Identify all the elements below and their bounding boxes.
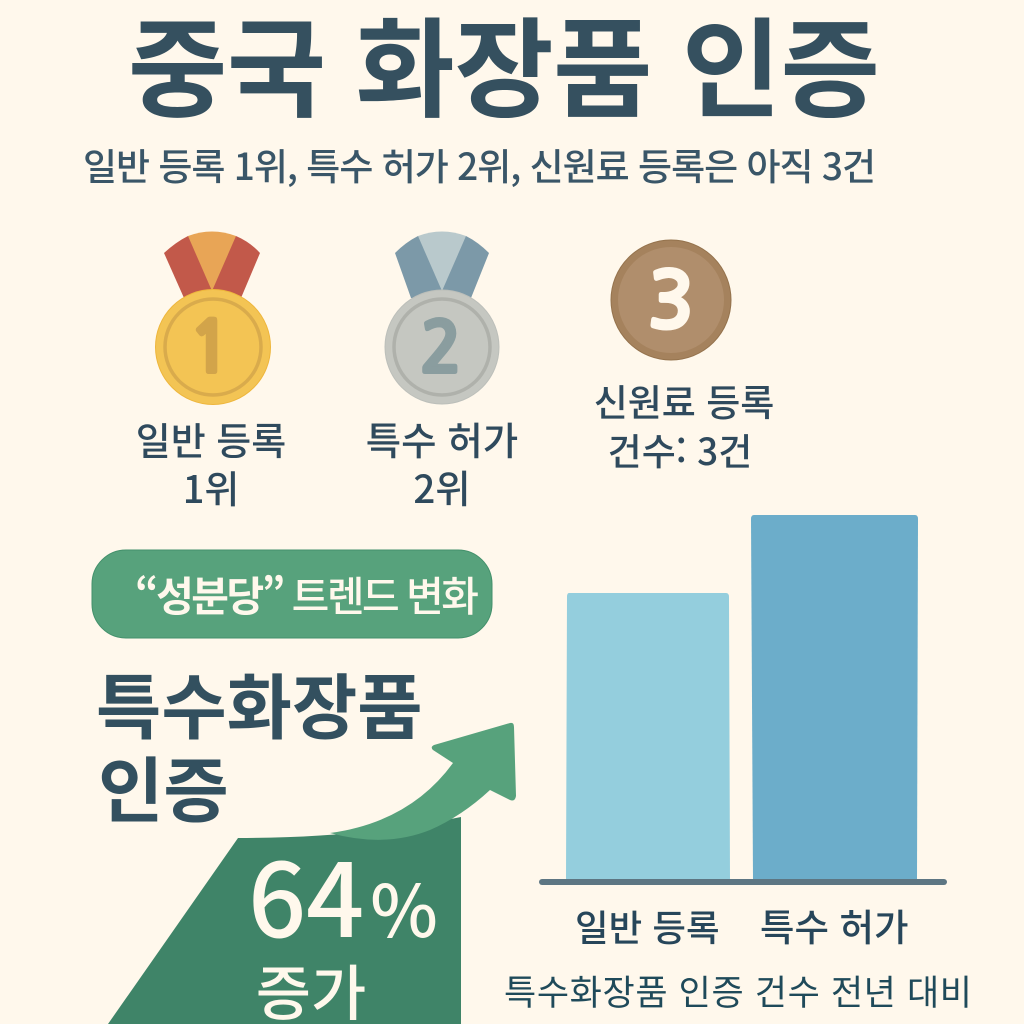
label: general registration rank: 일반 등록 — [136, 411, 286, 466]
heading: special cosmetics certification: 특수화장품 — [96, 652, 423, 754]
bar chart — [539, 515, 947, 952]
category labels: 특수 허가 — [760, 897, 908, 952]
icon: silver medal: 2 — [420, 314, 462, 383]
icon: bronze medal — [611, 240, 731, 360]
label: new ingredient registration count: 건수: 3건 — [608, 422, 752, 476]
icon: gold medal — [156, 232, 270, 404]
arrow — [330, 723, 516, 840]
label: special permit rank: 특수 허가 — [366, 411, 518, 467]
icon: bronze medal: 3 — [647, 262, 695, 340]
bar: special permit — [751, 515, 918, 880]
heading: special cosmetics certification: 인증 — [98, 735, 229, 837]
chart caption: 특수화장품 인증 건수 전년 대비 — [504, 965, 972, 1016]
label: new ingredient registration count: 신원료 등록 — [594, 373, 774, 427]
label: general registration rank: 1위 — [183, 459, 239, 514]
label: special permit rank: 2위 — [413, 459, 471, 515]
category labels: 일반 등록 — [575, 899, 720, 952]
bar: general registration — [566, 593, 730, 880]
growth shape with 64% callout — [108, 723, 516, 1024]
trend pill — [92, 550, 492, 638]
icon: gold medal: 1 — [189, 314, 231, 383]
chart baseline — [539, 879, 947, 885]
64% figure: 64% — [248, 820, 438, 967]
trend pill: “성분당” 트렌드 변화 — [135, 563, 479, 623]
subtitle: 일반 등록 1위, 특수 허가 2위, 신원료 등록은 아직 3건 — [83, 137, 876, 191]
icon: silver medal — [385, 232, 499, 404]
